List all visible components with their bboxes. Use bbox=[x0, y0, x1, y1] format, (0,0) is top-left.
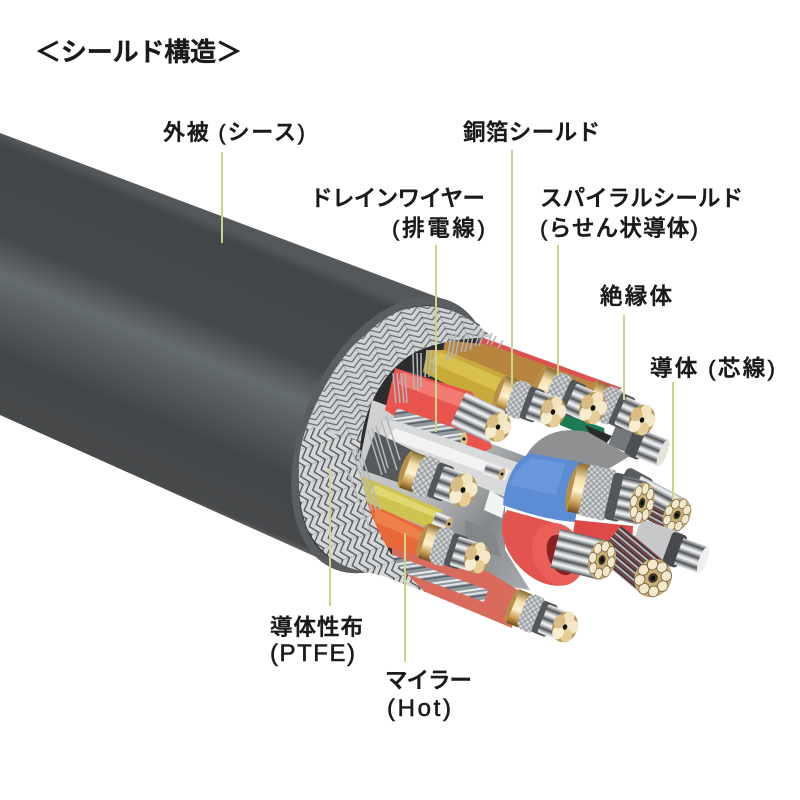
braided shield crescent bbox=[299, 306, 503, 592]
leader line: insulator bbox=[623, 315, 625, 400]
rear wires: red and brown bbox=[440, 338, 622, 410]
leader line: copper foil shield bbox=[511, 150, 513, 385]
wire: dark grey with shielded conductor bbox=[362, 432, 483, 514]
leader line: mylar bbox=[404, 533, 406, 662]
wire: second red with striped conductor bbox=[570, 520, 680, 605]
label: conductor: 導体 (芯線) bbox=[650, 356, 775, 381]
wire: far-right conductor bbox=[629, 518, 713, 578]
label: spiral shield bbox=[540, 186, 743, 241]
wire: upper shielded conductor 3 bbox=[574, 378, 661, 443]
wire: rear large conductor bbox=[609, 466, 698, 539]
cable outer jacket bbox=[0, 133, 533, 605]
wire: red insulated conductor with bare strands bbox=[385, 368, 517, 458]
white tube and foil highlights bbox=[380, 420, 525, 557]
label: spiral shield: (らせん状導体) bbox=[540, 216, 698, 241]
leader line: conductor bbox=[672, 382, 674, 500]
label: mylar: (Hot) bbox=[387, 695, 451, 722]
label: drain wire bbox=[310, 186, 485, 241]
wire: rear tip right bbox=[607, 418, 673, 469]
label: copper foil shield: 銅箔シールド bbox=[463, 120, 600, 145]
label: spiral shield: スパイラルシールド bbox=[540, 186, 743, 211]
leader line: sheath bbox=[221, 152, 223, 243]
label: PTFE: (PTFE) bbox=[270, 640, 355, 667]
wire: mustard insulated conductor bbox=[423, 350, 571, 434]
small drain tip on foil bbox=[483, 463, 507, 481]
wire: orange mylar with shielded conductor bbox=[362, 500, 495, 580]
drain wire bbox=[393, 408, 468, 446]
label: PTFE: 導体性布 bbox=[270, 615, 363, 640]
leader line: PTFE bbox=[329, 468, 331, 606]
wire: salmon insulated conductor with shield and drain bbox=[380, 545, 584, 649]
label: sheath: 外被 (シース) bbox=[163, 120, 305, 145]
wire: upper shielded conductor 2 bbox=[500, 360, 613, 432]
label: drain wire: ドレインワイヤー bbox=[310, 186, 485, 211]
wire: yellow mylar bbox=[356, 476, 454, 532]
central silver foil core bbox=[358, 400, 530, 590]
title: ＜シールド構造＞ bbox=[35, 37, 242, 67]
label: insulator: 絶縁体 bbox=[600, 284, 672, 309]
label: drain wire: (排電線) bbox=[392, 216, 485, 241]
label: PTFE bbox=[270, 615, 363, 667]
leader line: drain wire bbox=[435, 245, 437, 432]
label: mylar bbox=[385, 668, 472, 722]
wire: green insulated pair at rear bbox=[560, 412, 612, 452]
grey inner disc bbox=[520, 430, 630, 480]
label: mylar: マイラー bbox=[385, 668, 472, 693]
leader line: spiral shield bbox=[557, 245, 559, 376]
wire: red with large bare conductor bbox=[502, 510, 620, 593]
wire: blue with large shielded conductor bbox=[503, 453, 660, 531]
